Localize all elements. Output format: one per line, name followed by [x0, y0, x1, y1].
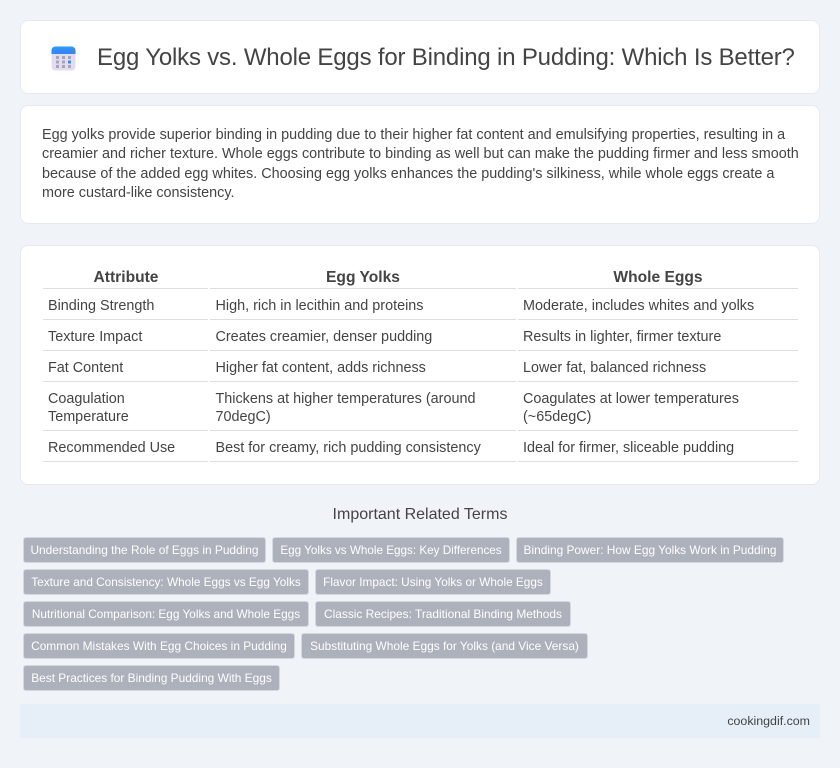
- footer source: cookingdif.com: [727, 714, 810, 728]
- tag: [23, 633, 295, 659]
- row: coagulation temperature: Coagulation: [48, 391, 125, 407]
- intro paragraph: Egg yolks provide superior binding in pudding due to their higher fat content and emulsifying properties, resulting in a: [42, 127, 785, 143]
- tag: Substituting Whole Eggs for Yolks (and Vice Versa): [310, 639, 579, 653]
- title card: [20, 20, 820, 94]
- row: coagulation temperature: [48, 391, 129, 425]
- tag: [23, 601, 309, 627]
- binding strength: whole eggs: Moderate, includes whites and yolks: [523, 298, 754, 314]
- tag: Classic Recipes: Traditional Binding Methods: [324, 607, 562, 621]
- comparison table card: [20, 245, 820, 485]
- binding strength: egg yolks: High, rich in lecithin and proteins: [216, 298, 423, 314]
- row: texture impact: Texture Impact: [48, 329, 142, 345]
- tag: [315, 569, 551, 595]
- related terms tags: [23, 537, 784, 691]
- tag: Nutritional Comparison: Egg Yolks and Whole Eggs: [32, 607, 300, 621]
- tag: [23, 665, 280, 691]
- recommended use: egg yolks: Best for creamy, rich pudding consistency: [216, 440, 481, 456]
- table header: egg yolks: Egg Yolks: [326, 269, 400, 286]
- table header: whole eggs: Whole Eggs: [613, 269, 703, 286]
- texture impact: egg yolks: Creates creamier, denser pudding: [216, 329, 432, 345]
- tag: Common Mistakes With Egg Choices in Pudding: [31, 639, 287, 653]
- tag: Flavor Impact: Using Yolks or Whole Eggs: [323, 575, 543, 589]
- row: fat content: Fat Content: [48, 360, 123, 376]
- tag: Binding Power: How Egg Yolks Work in Pudding: [524, 543, 776, 557]
- tag: [272, 537, 510, 563]
- title: Egg Yolks vs. Whole Eggs for Binding in Pudding: Which Is Better?: [97, 44, 795, 71]
- texture impact: whole eggs: Results in lighter, firmer texture: [523, 329, 721, 345]
- tag: Texture and Consistency: Whole Eggs vs Egg Yolks: [31, 575, 301, 589]
- related terms heading: Important Related Terms: [333, 506, 507, 523]
- intro text card: [20, 105, 820, 224]
- fat content: egg yolks: Higher fat content, adds richness: [216, 360, 426, 376]
- coagulation: egg yolks: Thickens at higher temperatures (around: [216, 391, 475, 407]
- footer bar: [20, 704, 820, 738]
- intro paragraph: creamier and richer texture. Whole eggs contribute to binding as well but can make the pudding firmer and less smooth: [42, 146, 799, 162]
- intro paragraph: [42, 127, 799, 201]
- coagulation: whole eggs: [523, 391, 739, 425]
- tag: Understanding the Role of Eggs in Pudding: [30, 543, 259, 557]
- row: binding strength: Binding Strength: [48, 298, 154, 314]
- tag: Best Practices for Binding Pudding With Eggs: [31, 671, 272, 685]
- coagulation: whole eggs: (~65degC): [523, 409, 591, 425]
- tag: [23, 569, 309, 595]
- tag: [301, 633, 588, 659]
- tag: Egg Yolks vs Whole Eggs: Key Differences: [280, 544, 502, 557]
- intro paragraph: more custard-like consistency.: [42, 185, 234, 201]
- row: recommended use: Recommended Use: [48, 440, 175, 456]
- tag: [516, 537, 784, 563]
- coagulation: whole eggs: Coagulates at lower temperatures: [523, 391, 739, 407]
- tag: [315, 601, 571, 627]
- intro paragraph: because of the added egg whites. Choosing egg yolks enhances the pudding's silkiness, while whole eggs create a: [42, 166, 774, 182]
- recommended use: whole eggs: Ideal for firmer, sliceable pudding: [523, 440, 734, 456]
- fat content: whole eggs: Lower fat, balanced richness: [523, 360, 706, 376]
- table header: attribute: Attribute: [94, 269, 158, 286]
- coagulation: egg yolks: [216, 391, 475, 425]
- row: coagulation temperature: Temperature: [48, 409, 129, 425]
- icon: calendar: [52, 46, 76, 70]
- coagulation: egg yolks: 70degC): [216, 409, 271, 425]
- tag: [23, 537, 266, 563]
